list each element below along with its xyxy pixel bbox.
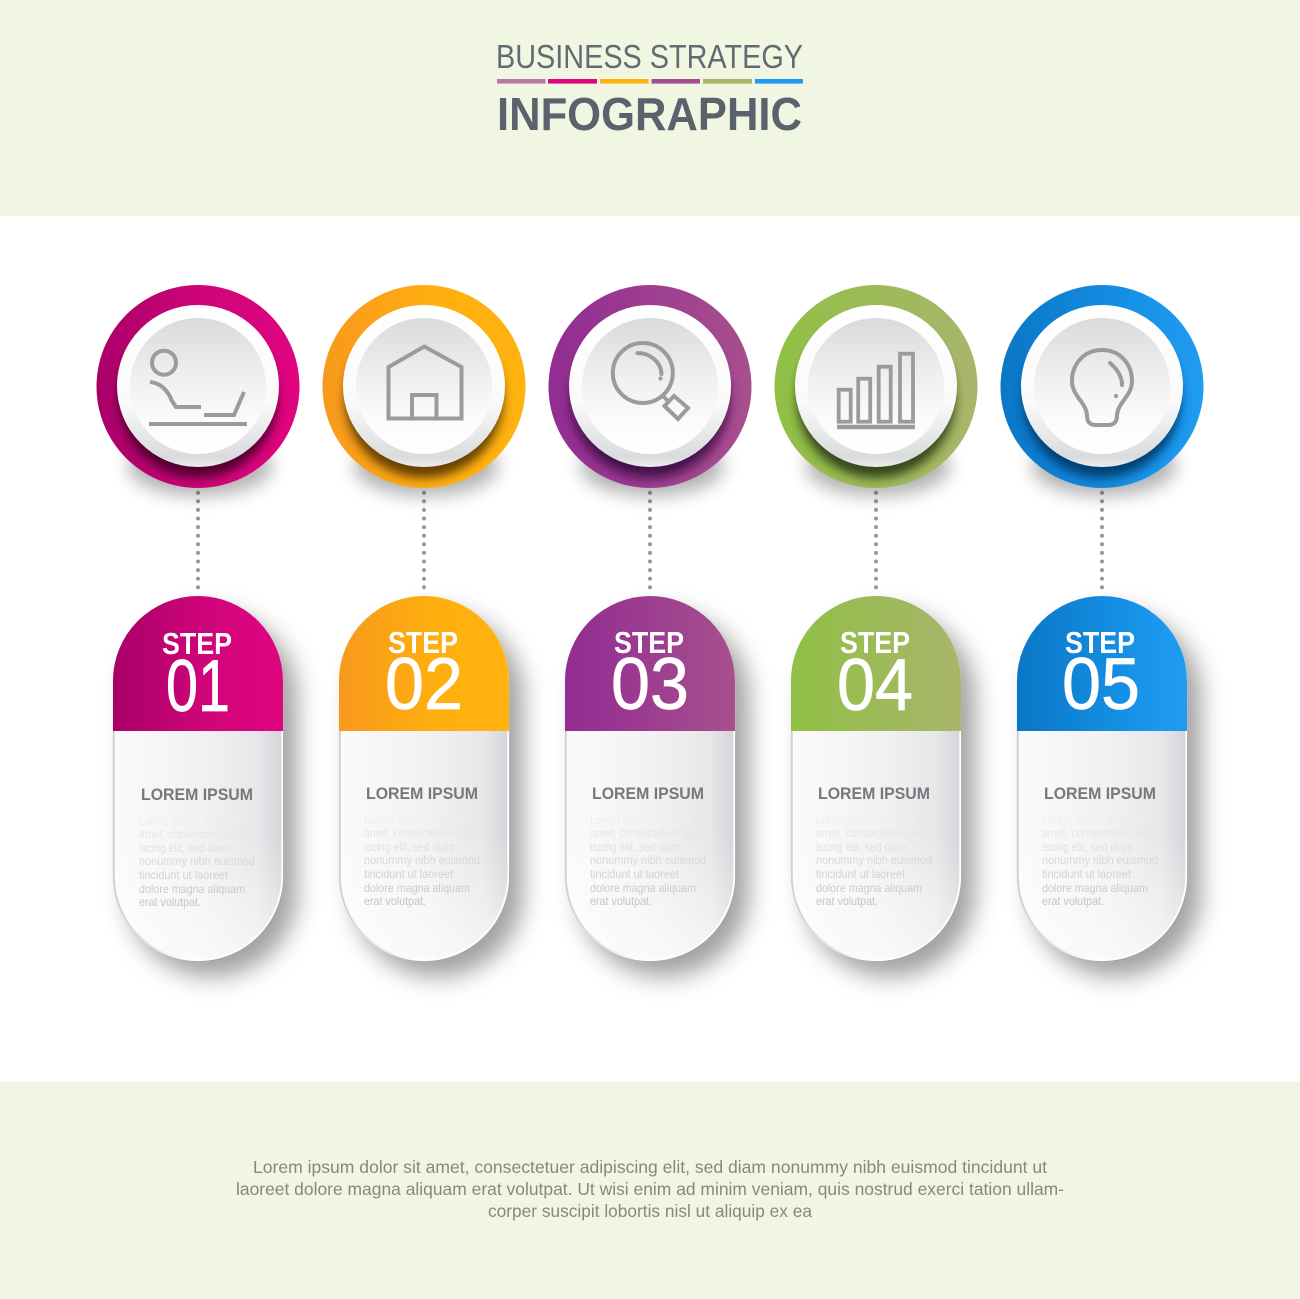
icon: person on lounge chair [149, 351, 247, 424]
card body text [364, 814, 481, 908]
step 1 column [96, 285, 300, 977]
step label: STEP [388, 625, 458, 660]
card body text: tincidunt ut laoreet [364, 868, 454, 881]
icon: light bulb [1072, 350, 1132, 425]
card body text: iscing elit, sed diam [590, 841, 681, 854]
card body text: erat volutpat. [364, 895, 426, 908]
card body text: Lorem ipsum dolor sit [816, 814, 918, 827]
connector dotted line [196, 493, 200, 589]
card body text: nonummy nibh euismod [139, 855, 255, 868]
step label: STEP [614, 625, 684, 660]
card body text: Lorem ipsum dolor sit [139, 815, 241, 828]
card body text: tincidunt ut laoreet [139, 869, 229, 882]
pill card [1017, 596, 1201, 977]
bottom footer band [0, 1082, 1300, 1299]
pill card [339, 596, 523, 977]
icon: magnifying glass [613, 343, 688, 419]
card body text: iscing elit, sed diam [1042, 841, 1133, 854]
card body text: nonummy nibh euismod [364, 854, 480, 867]
connector dotted line [874, 493, 878, 589]
card body text: iscing elit, sed diam [139, 842, 230, 855]
card body text: Lorem ipsum dolor sit [590, 814, 692, 827]
card body text: dolore magna aliquam [1042, 882, 1148, 895]
pill card [113, 596, 297, 977]
card body text: dolore magna aliquam [816, 882, 922, 895]
heading: infographic: INFOGRAPHIC [497, 88, 802, 140]
circle badge [774, 285, 978, 496]
circle badge [96, 285, 300, 496]
step 3 column [548, 285, 752, 977]
step label: STEP [1065, 625, 1135, 660]
card body text: erat volutpat. [590, 895, 652, 908]
footer text: Lorem ipsum dolor sit amet, consectetuer adipiscing elit, sed diam nonummy nibh euismod tincidunt ut [253, 1157, 1047, 1177]
card body text: erat volutpat. [139, 896, 201, 909]
step 4 column [774, 285, 978, 977]
connector dotted line [648, 493, 652, 589]
card body text: dolore magna aliquam [364, 882, 470, 895]
circle badge [322, 285, 526, 496]
step label: 02 [385, 644, 463, 725]
pill card [791, 596, 975, 977]
step label: 01 [166, 646, 230, 727]
connector dotted line [1100, 493, 1104, 589]
card body text: erat volutpat. [1042, 895, 1104, 908]
card body text: tincidunt ut laoreet [1042, 868, 1132, 881]
step label: STEP [840, 625, 910, 660]
footer text: laoreet dolore magna aliquam erat volutpat. Ut wisi enim ad minim veniam, quis nostrud exerci tation ullam- [236, 1179, 1064, 1199]
card body text: amet, consectetuer adip- [816, 827, 933, 840]
footer text [236, 1157, 1064, 1221]
card body text: dolore magna aliquam [590, 882, 696, 895]
card body text: iscing elit, sed diam [816, 841, 907, 854]
card body text: Lorem ipsum dolor sit [364, 814, 466, 827]
card body text: tincidunt ut laoreet [816, 868, 906, 881]
card body text [590, 814, 707, 908]
card body text: nonummy nibh euismod [1042, 854, 1158, 867]
card body text: dolore magna aliquam [139, 883, 245, 896]
icon: house [388, 346, 462, 418]
circle badge [548, 285, 752, 496]
card heading: LOREM IPSUM [1044, 785, 1156, 803]
step label: 04 [837, 645, 913, 726]
top header band [0, 0, 1300, 216]
card body text: Lorem ipsum dolor sit [1042, 814, 1144, 827]
pill card [565, 596, 749, 977]
title [496, 38, 803, 140]
step 5 column [1000, 285, 1204, 977]
step label [162, 626, 232, 727]
card body text [816, 814, 933, 908]
icon: bar chart [837, 354, 915, 427]
card body text: nonummy nibh euismod [816, 854, 932, 867]
footer text: corper suscipit lobortis nisl ut aliquip ex ea [488, 1201, 812, 1221]
step 2 column [322, 285, 526, 977]
card heading: LOREM IPSUM [141, 786, 253, 804]
colour bars under heading [497, 79, 803, 84]
connector dotted line [422, 493, 426, 589]
card body text: erat volutpat. [816, 895, 878, 908]
card body text [1042, 814, 1159, 908]
card body text: tincidunt ut laoreet [590, 868, 680, 881]
card heading: LOREM IPSUM [592, 785, 704, 803]
step label: STEP [162, 626, 232, 661]
card heading: LOREM IPSUM [818, 785, 930, 803]
card body text: amet, consectetuer adip- [1042, 827, 1159, 840]
card body text [139, 815, 256, 909]
card body text: amet, consectetuer adip- [364, 827, 481, 840]
card body text: iscing elit, sed diam [364, 841, 455, 854]
card body text: amet, consectetuer adip- [139, 828, 256, 841]
circle badge [1000, 285, 1204, 496]
card body text: nonummy nibh euismod [590, 854, 706, 867]
card heading: LOREM IPSUM [366, 785, 478, 803]
card body text: amet, consectetuer adip- [590, 827, 707, 840]
step label: 05 [1062, 644, 1140, 725]
heading: business strategy: BUSINESS STRATEGY [496, 38, 803, 75]
step label: 03 [611, 644, 689, 725]
